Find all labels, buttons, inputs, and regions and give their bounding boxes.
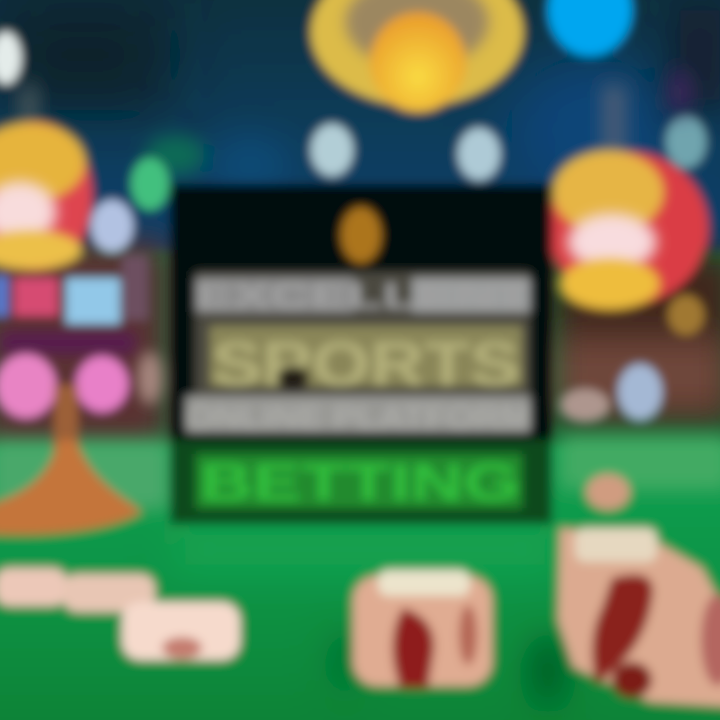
- heading: green betting label: BETTING: [200, 454, 520, 512]
- icon: right stand lights: [561, 295, 704, 421]
- text: subtitle line: ONLINE PLATFORM: [186, 399, 531, 435]
- icon: small chip on table: [586, 474, 630, 510]
- icon: centre chip stack: [353, 570, 492, 688]
- icon: amber emblem: [341, 207, 381, 263]
- icon: left pink lamps: [0, 352, 162, 418]
- icon: top yellow emoji ball: [311, 0, 523, 112]
- heading: top line: [195, 275, 530, 316]
- icon: right emoji ball: [548, 150, 708, 310]
- background: green felt table: [0, 435, 720, 720]
- shadow: under chip stacks: [333, 630, 566, 706]
- icon: left coloured tiles: [0, 255, 148, 354]
- icons: small stage lights: [0, 32, 706, 252]
- panel: central sign: [170, 184, 552, 524]
- icon: left chip row: [0, 568, 240, 660]
- icon: left emoji ball: [0, 122, 92, 270]
- background: night sky: [0, 0, 720, 250]
- background: stadium stands: [0, 240, 720, 450]
- icon: blue light: [548, 0, 632, 56]
- heading: main title: SPORTS: [212, 330, 520, 399]
- icon: brown trophy stand: [0, 385, 142, 535]
- heading: top line: EXCELLENT: [195, 275, 530, 316]
- icon: right chip stack: [558, 528, 720, 707]
